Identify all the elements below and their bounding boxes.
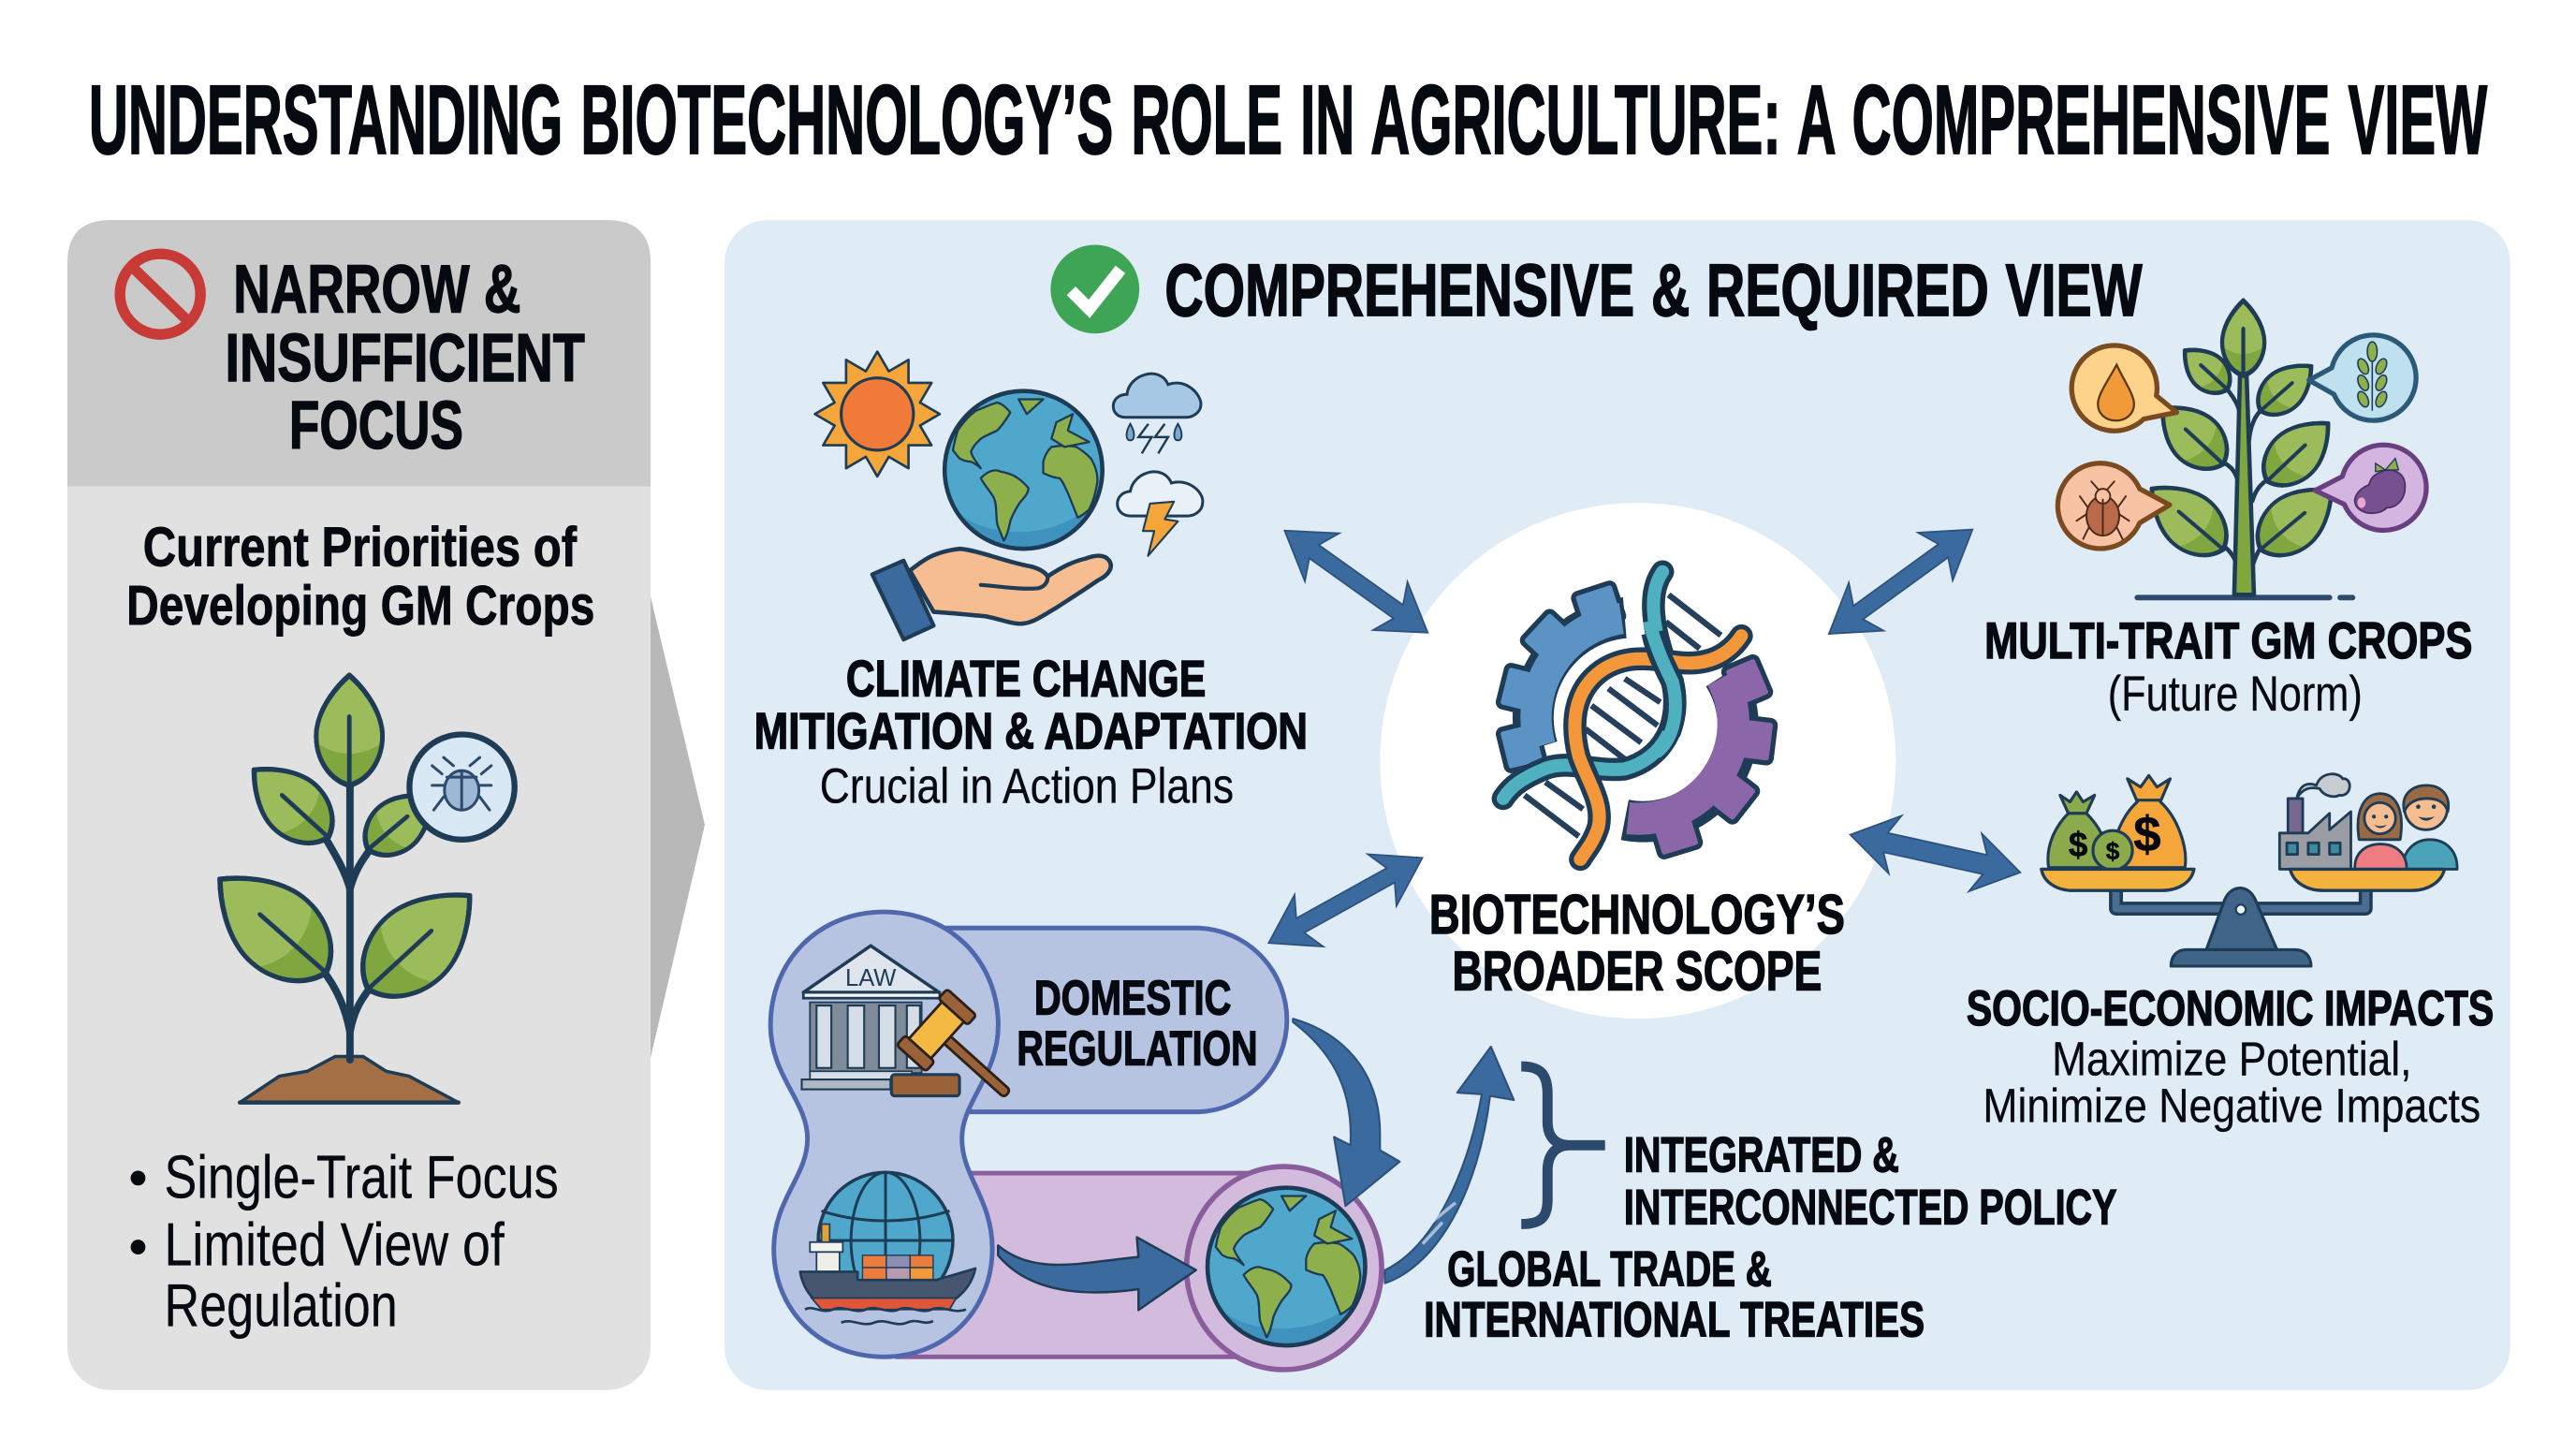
central white circle [1380,503,1895,1019]
arrow: trade to global [998,1238,1196,1310]
label: socio-economic impacts: Maximize Potential, [2052,1032,2411,1085]
faces [2372,804,2436,829]
label: domestic regulation [1017,971,1258,1076]
label: integrated policy: INTERCONNECTED POLICY [1624,1180,2116,1235]
bullet list [131,1142,559,1339]
icon: DNA and gears [1497,572,1776,859]
icon: balance scale: $ [2106,837,2120,865]
icon: balance scale: $ [2133,807,2161,862]
blue gear [1497,581,1625,771]
label: biotechnology's broader scope: BIOTECHNOLOGY’S [1429,883,1845,946]
label: climate change: Crucial in Action Plans [820,758,1234,814]
label: global trade and treaties [1424,1241,1925,1347]
icon: climate [815,352,1203,639]
label: global trade and treaties: GLOBAL TRADE & [1447,1241,1772,1297]
icon: multi-trait plant [2057,301,2426,597]
icon: green check [1050,244,1139,333]
icon: wheat bubble [2309,335,2416,420]
icon: balance scale: $ [2069,825,2087,863]
icon: single-trait plant [191,675,515,1103]
label: biotechnology's broader scope: BROADER SCOPE [1453,939,1822,1002]
label: global trade and treaties: INTERNATIONAL TREATIES [1424,1292,1925,1347]
icon: world globe [1208,1188,1365,1345]
label: multi-trait GM crops: (Future Norm) [2108,667,2363,722]
rungs [1525,594,1720,836]
subheading: current priorities: Current Priorities of [143,516,577,579]
label: climate change [754,650,1308,814]
label: socio-economic impacts: Minimize Negative Impacts [1983,1078,2481,1132]
panel: comprehensive and required view [724,220,2510,1390]
subheading: current priorities: Developing GM Crops [126,574,594,637]
icon: law building and gavel: LAW [845,965,896,991]
icon: globe and cargo ship [800,1172,975,1324]
panel header [67,220,651,486]
brace [1521,1066,1605,1224]
purple gear [1625,655,1776,858]
heading: narrow and insufficient focus: INSUFFICIENT [225,321,585,396]
arrow: policy to center [1254,832,1437,969]
label: climate change: MITIGATION & ADAPTATION [754,702,1308,759]
bullet list: Single-Trait Focus [165,1142,559,1211]
label: socio-economic impacts [1967,981,2494,1132]
icon: oil drop bubble [2071,345,2176,431]
heading: narrow and insufficient focus: NARROW & [233,252,520,327]
teal strand [1503,572,1675,799]
diagram: domestic regulation and global trade [770,912,1399,1370]
label: domestic regulation: DOMESTIC [1034,971,1231,1025]
label: climate change: CLIMATE CHANGE [846,650,1206,707]
arrow: climate to center [1267,506,1445,657]
icon: tuber bubble [2315,445,2426,530]
subheading: current priorities [126,516,594,637]
heading: narrow and insufficient focus [225,252,585,463]
icon: factory and people [2279,774,2457,869]
label: domestic regulation: REGULATION [1017,1021,1258,1076]
icon: balance scale [2042,774,2457,966]
pill: domestic regulation [920,928,1287,1112]
label: multi-trait GM crops [1984,612,2472,722]
teal over orange [1653,633,1675,733]
blob: icons holder [770,912,998,1357]
panel: narrow and insufficient focus [67,220,651,1390]
heading: comprehensive view: COMPREHENSIVE & REQUIRED VIEW [1164,249,2143,331]
icon: law building and gavel [802,946,1032,1123]
label: integrated policy: INTEGRATED & [1624,1128,1899,1183]
bullet list: Limited View of [165,1210,505,1278]
icon: money bags [2048,775,2186,870]
label: biotechnology's broader scope [1429,883,1845,1002]
icon: insect badge [409,734,515,840]
icon: prohibited sign [120,254,200,334]
pans [2042,869,2445,890]
arrow: multi-trait to center [1811,506,1990,658]
globe ring [1187,1167,1382,1370]
icon: pest bubble [2057,463,2170,549]
arrow: socio-economic to center [1844,806,2027,902]
arrow: global outcome to center [1385,1047,1514,1284]
arrow: left panel to right panel [649,590,705,1064]
pill: global trade [896,1173,1281,1357]
label: integrated policy [1624,1128,2116,1235]
bullet list: Regulation [165,1270,398,1339]
heading: narrow and insufficient focus: FOCUS [289,389,463,463]
orange strand [1574,636,1741,859]
arrow: regulation to global [1293,1019,1399,1206]
